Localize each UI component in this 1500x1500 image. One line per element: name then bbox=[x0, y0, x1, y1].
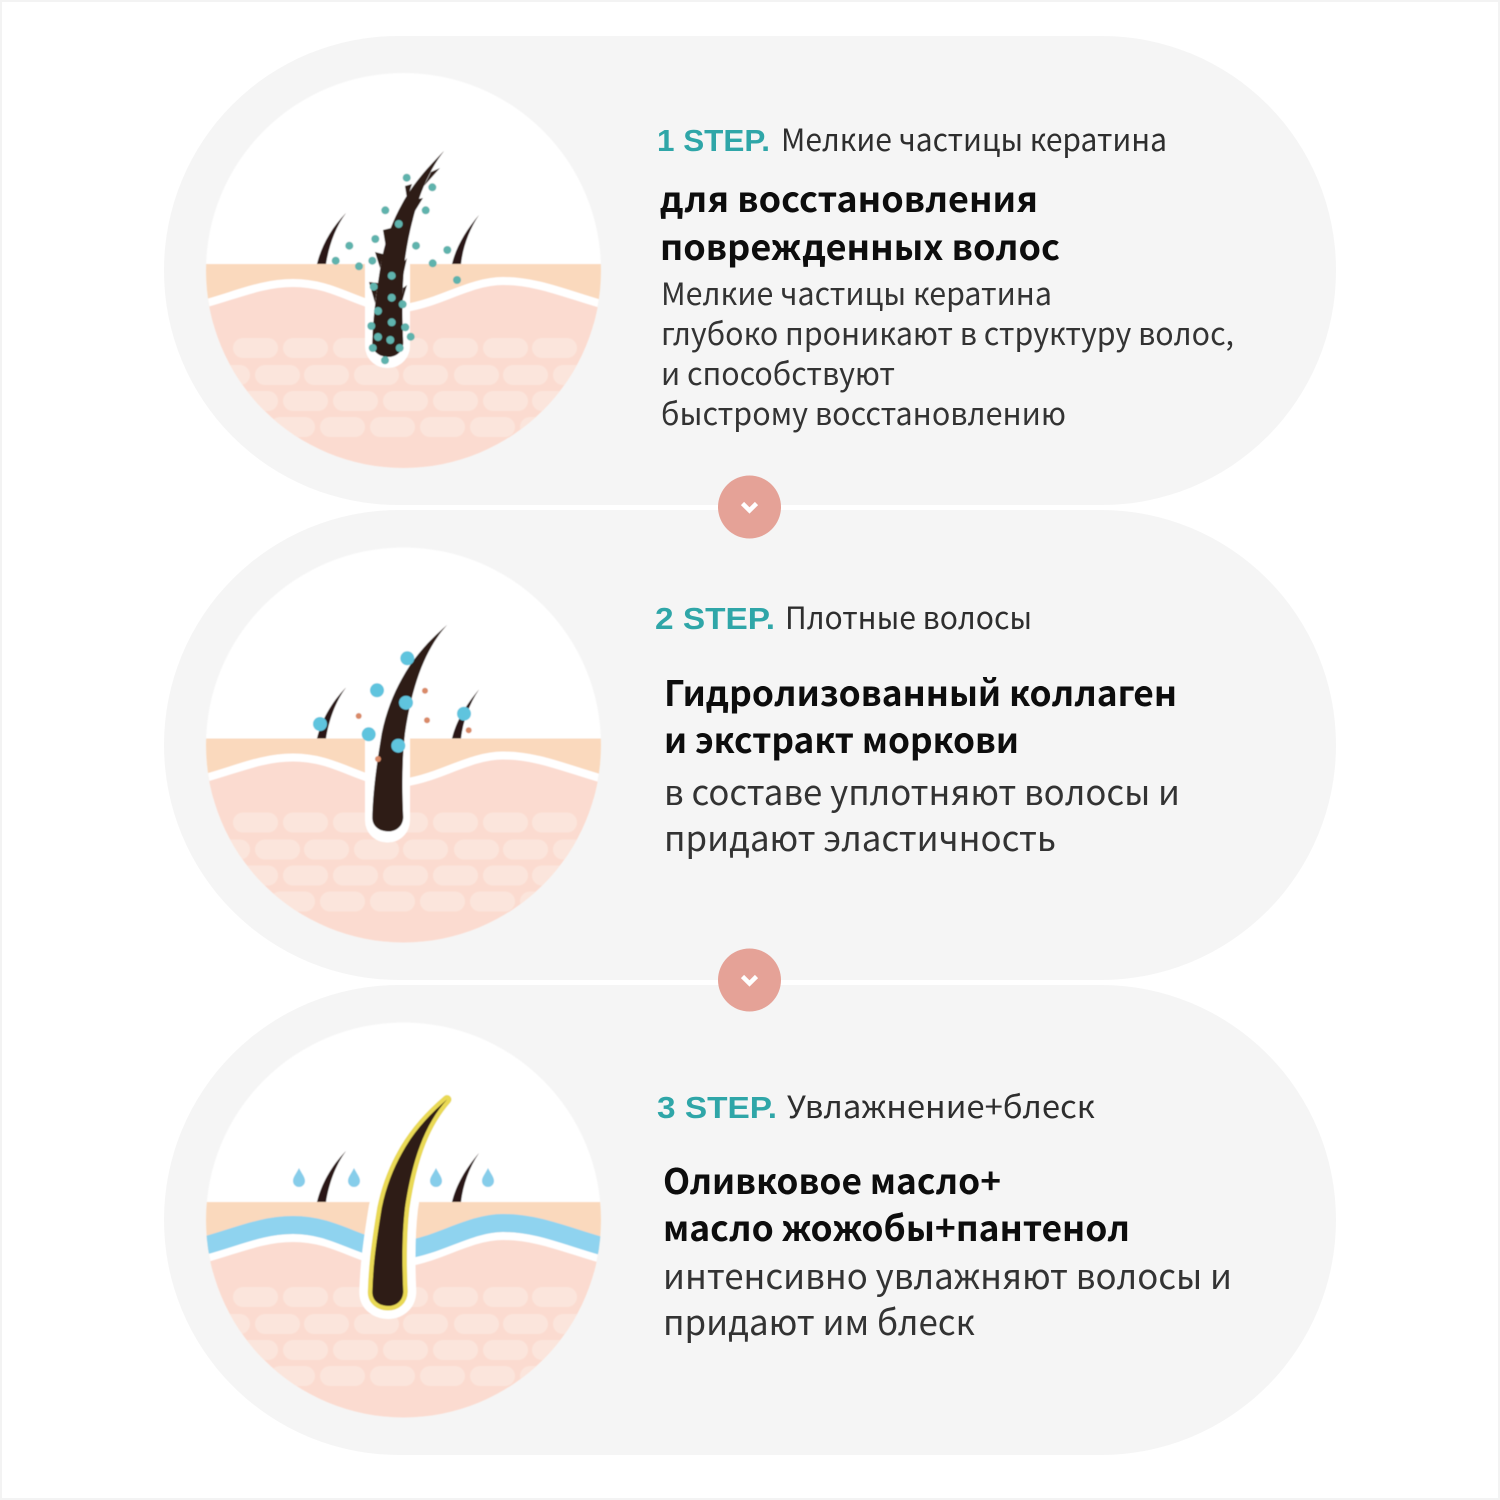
text: step 2: в составе уплотняют волосы и bbox=[664, 765, 1180, 816]
text: step 3: интенсивно увлажняют волосы и bbox=[663, 1249, 1232, 1300]
icon: hairs bbox=[317, 625, 479, 832]
icon: carrot extract dots bbox=[356, 688, 472, 762]
arrow: step 2 to step 3 bbox=[718, 948, 781, 1012]
illustration: step 2 collagen and carrot extract bbox=[206, 548, 602, 943]
text: step 3: Оливковое масло+ bbox=[663, 1154, 1001, 1205]
icon: main hair with shine coating bbox=[372, 1100, 447, 1306]
text: step 2: 2 STEP. bbox=[655, 601, 775, 636]
text: step 3: Увлажнение+блеск bbox=[787, 1082, 1095, 1127]
text: step 2 bbox=[655, 593, 1180, 862]
text: step 3: придают им блеск bbox=[663, 1295, 975, 1346]
text: step 1 bbox=[657, 115, 1234, 434]
text: step 1: для восстановления bbox=[660, 172, 1038, 223]
text: step 3: масло жожобы+пантенол bbox=[663, 1201, 1130, 1252]
icon: water drops bbox=[293, 1168, 494, 1187]
panel: step 3 pill bbox=[164, 985, 1336, 1455]
text: step 2: Гидролизованный коллаген bbox=[664, 666, 1177, 717]
icon: small hairs bbox=[317, 213, 479, 264]
text: step 1: быстрому восстановлению bbox=[661, 389, 1066, 434]
text: step 1: поврежденных волос bbox=[660, 220, 1060, 271]
text: step 2: придают эластичность bbox=[664, 811, 1056, 862]
icon: small hairs bbox=[317, 1151, 479, 1202]
text: step 3 bbox=[657, 1082, 1232, 1346]
panel: step 2 pill bbox=[164, 510, 1336, 980]
icon: damaged main hair bbox=[369, 151, 444, 357]
text: step 3: 3 STEP. bbox=[657, 1090, 777, 1125]
text: step 1: и способствуют bbox=[661, 349, 895, 394]
panel: step 1 pill bbox=[164, 36, 1336, 505]
text: step 1: 1 STEP. bbox=[657, 123, 770, 158]
text: step 1: Мелкие частицы кератина bbox=[661, 269, 1052, 314]
illustration: step 3 moisture and shine bbox=[206, 1023, 602, 1418]
illustration: step 1 keratin particles on hair bbox=[206, 74, 602, 468]
icon: keratin particles bbox=[332, 174, 461, 364]
text: step 1: Мелкие частицы кератина bbox=[781, 115, 1167, 160]
text: step 1: глубоко проникают в структуру волос, bbox=[661, 309, 1234, 354]
text: step 2: и экстракт моркови bbox=[664, 713, 1019, 764]
icon: collagen drops bbox=[313, 651, 471, 753]
text: step 2: Плотные волосы bbox=[785, 593, 1032, 638]
arrow: step 1 to step 2 bbox=[718, 476, 781, 538]
